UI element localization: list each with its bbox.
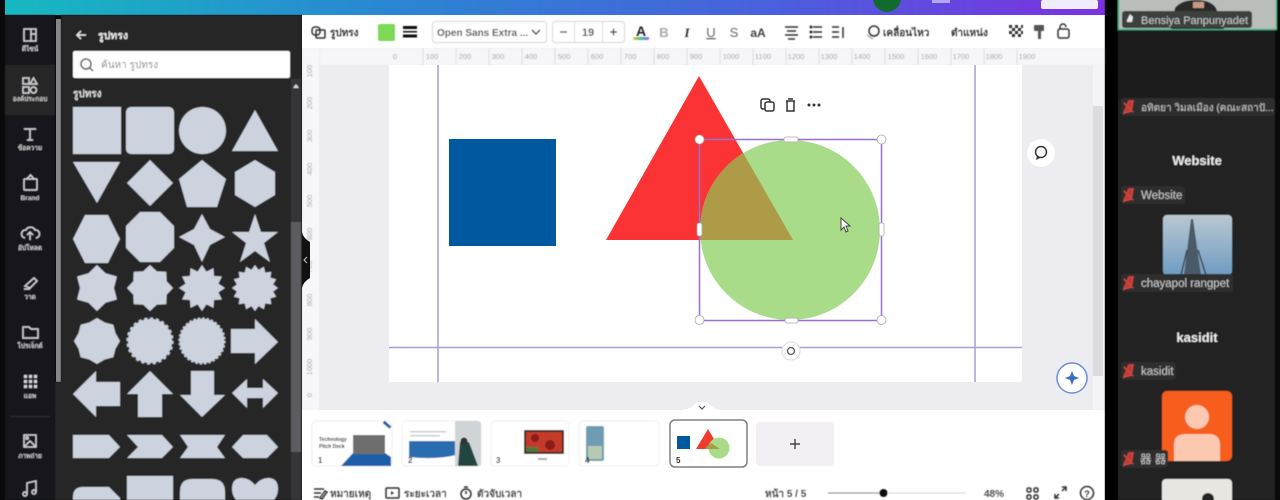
thumbnail 2: 2: [408, 456, 413, 465]
left ruler: 200: [305, 97, 314, 109]
top ruler: 1900: [1019, 52, 1035, 61]
nav: uploads: อัปโหลด: [18, 243, 42, 252]
top ruler: 0: [393, 52, 397, 61]
timer: ตัวจับเวลา: [477, 488, 522, 500]
zoom percent: 48%: [984, 489, 1004, 500]
bold italic underline strike case: I: [683, 25, 690, 40]
footer right controls: [765, 486, 1094, 500]
top ruler: 800: [657, 52, 669, 61]
zoom slider: [828, 489, 965, 497]
left ruler: 300: [305, 130, 314, 142]
selection box and handles: [695, 135, 886, 324]
nav: design: ดีไซน์: [22, 44, 39, 53]
section label: รูปทรง: [73, 88, 102, 101]
footer left controls: [314, 487, 522, 500]
left ruler: 700: [305, 261, 314, 273]
tile: participant one: อทิตยา วิมลเมือง (คณะสถาปั...: [1141, 102, 1273, 114]
left ruler: 100: [305, 65, 314, 77]
top ruler: 1700: [953, 52, 969, 61]
tile: participant one: [1121, 98, 1275, 116]
tile: orange avatar: 器 器: [1140, 453, 1167, 466]
timer: [461, 487, 522, 500]
top ruler: 900: [690, 52, 702, 61]
editor background: [302, 15, 1105, 500]
nav: apps: [24, 375, 37, 400]
comment refresh button: [1027, 139, 1055, 167]
bold italic underline strike case: [659, 25, 766, 40]
page strip background: [302, 402, 1105, 500]
text colour: A: [636, 23, 646, 39]
nav: text: ข้อความ: [18, 143, 42, 152]
tile: Website: Website: [1141, 190, 1182, 202]
help icon: [1080, 486, 1094, 500]
thumbnail 1: Technology: [319, 437, 347, 443]
tile: partial photo: [1162, 479, 1232, 500]
thumbnail 2: [402, 421, 481, 466]
nav: projects: [16, 327, 43, 350]
nav: text: [18, 129, 42, 152]
overlap of triangle and circle: [700, 153, 793, 240]
toolbar: [312, 22, 1069, 42]
top ruler: 100: [426, 52, 438, 61]
stroke icon: [403, 26, 417, 38]
top ruler: 1200: [788, 52, 804, 61]
top ruler: 400: [525, 52, 537, 61]
bold italic underline strike case: U: [706, 25, 716, 40]
thumbnail 5 selected: [670, 420, 747, 467]
tile: kasidit: [1121, 330, 1218, 380]
top ruler: 1400: [854, 52, 870, 61]
thumbnail 1: [312, 421, 392, 466]
tile: orange avatar: [1121, 391, 1232, 468]
duration: ระยะเวลา: [404, 489, 447, 500]
nav: photos: ภาพถ่าย: [18, 452, 42, 460]
rail scrollbar: [56, 19, 61, 382]
left ruler: 800: [305, 294, 314, 306]
top ruler: 1800: [986, 52, 1002, 61]
text colour: [633, 23, 649, 40]
font size: [552, 22, 624, 42]
top ruler: 200: [459, 52, 471, 61]
top ruler: [320, 48, 1105, 65]
left ruler: 1000: [305, 359, 314, 375]
thumbnail 5 selected: 5: [676, 456, 681, 465]
top ruler: 1300: [821, 52, 837, 61]
page canvas: [389, 65, 1022, 382]
thumbnail 4: [579, 421, 659, 466]
shape tool label: รูปทรง: [330, 27, 359, 40]
notes: หมายเหตุ: [330, 489, 371, 500]
shape grid: [73, 107, 278, 500]
top ruler: 500: [558, 52, 570, 61]
top ruler: 1000: [723, 52, 739, 61]
grid view icon: [1027, 488, 1038, 499]
thumbnail 4: 4: [585, 456, 590, 465]
shape tool label: [312, 27, 359, 40]
transparency copy-style lock icons: [1009, 24, 1069, 39]
bold italic underline strike case: S: [730, 25, 739, 40]
top ruler: 600: [591, 52, 603, 61]
top bar: [5, 0, 1105, 15]
tile: chayapol: [1121, 215, 1233, 292]
green circle: [700, 140, 880, 320]
tile: Bensiya: Bensiya Panpunyadet: [1141, 15, 1248, 27]
top ruler: 1100: [755, 52, 771, 61]
left ruler: [303, 48, 319, 410]
canvas scrollbar: [1093, 65, 1105, 410]
font selector: [432, 22, 546, 42]
thumbnail 1: 1: [318, 456, 323, 465]
magic assistant button: [1057, 363, 1087, 393]
thumbnail 3: [491, 421, 569, 466]
nav: elements: องค์ประกอบ: [13, 95, 47, 103]
tile: chayapol: chayapol rangpet: [1141, 278, 1230, 290]
tile: Website: Website: [1172, 153, 1222, 168]
nav: apps: แอพ: [24, 393, 36, 400]
nav: elements: [13, 78, 47, 103]
fullscreen icon: [1055, 487, 1066, 498]
left ruler: 0: [305, 393, 314, 397]
left ruler: 600: [305, 228, 314, 240]
duration: [386, 488, 447, 500]
guides: [389, 65, 1022, 382]
floating element toolbar: [754, 91, 827, 119]
blue square: [449, 139, 556, 246]
animate: [867, 25, 930, 39]
nav: draw: [24, 278, 37, 301]
align list spacing icons: [785, 27, 843, 39]
nav: draw: วาด: [24, 294, 36, 301]
cursor: [841, 218, 850, 232]
left ruler: 400: [305, 163, 314, 175]
top ruler: 700: [624, 52, 636, 61]
thumbnail 3: 3: [496, 456, 501, 465]
left navigation rail: [5, 15, 55, 500]
left ruler: 900: [305, 328, 314, 340]
top ruler: 300: [492, 52, 504, 61]
bold italic underline strike case: B: [659, 25, 669, 40]
back arrow and heading: [77, 30, 128, 43]
font selector: Open Sans Extra ...: [437, 28, 528, 39]
panel collapse handle: [302, 232, 310, 288]
nav: projects: โปรเจ็กต์: [16, 341, 43, 350]
nav: photos: [18, 435, 42, 460]
search box: ค้นหา รูปทรง: [101, 59, 158, 71]
panel: video participants: [1105, 0, 1276, 500]
red triangle: [606, 76, 793, 240]
top ruler: 1600: [921, 52, 937, 61]
back arrow and heading: รูปทรง: [98, 30, 128, 43]
help icon: ?: [1084, 489, 1090, 499]
top ruler: 1500: [888, 52, 904, 61]
position: ตำแหน่ง: [951, 27, 988, 39]
panel scrollbar: [291, 79, 301, 500]
thumbnail 1: Pitch Deck: [319, 444, 345, 450]
panel: shapes library: [55, 15, 302, 500]
fill colour swatch: [378, 24, 395, 41]
font size: 19: [582, 27, 594, 39]
tile: kasidit: kasidit: [1141, 366, 1174, 378]
nav: audio: [23, 481, 36, 496]
nav: brand: Brand: [21, 195, 39, 202]
animate: เคลื่อนไหว: [883, 25, 930, 39]
nav: uploads: [18, 227, 42, 252]
search box: [73, 51, 290, 78]
nav: brand: [21, 175, 39, 202]
bold italic underline strike case: aA: [750, 26, 766, 40]
add page button: [756, 422, 834, 466]
page counter: หน้า 5 / 5: [765, 488, 807, 500]
tile: Bensiya: [1118, 0, 1276, 30]
rotate handle: [782, 342, 800, 360]
left ruler: 500: [305, 195, 314, 207]
tile: Website: [1121, 153, 1222, 204]
nav: design: [22, 29, 39, 53]
tile: kasidit: kasidit: [1176, 330, 1218, 345]
